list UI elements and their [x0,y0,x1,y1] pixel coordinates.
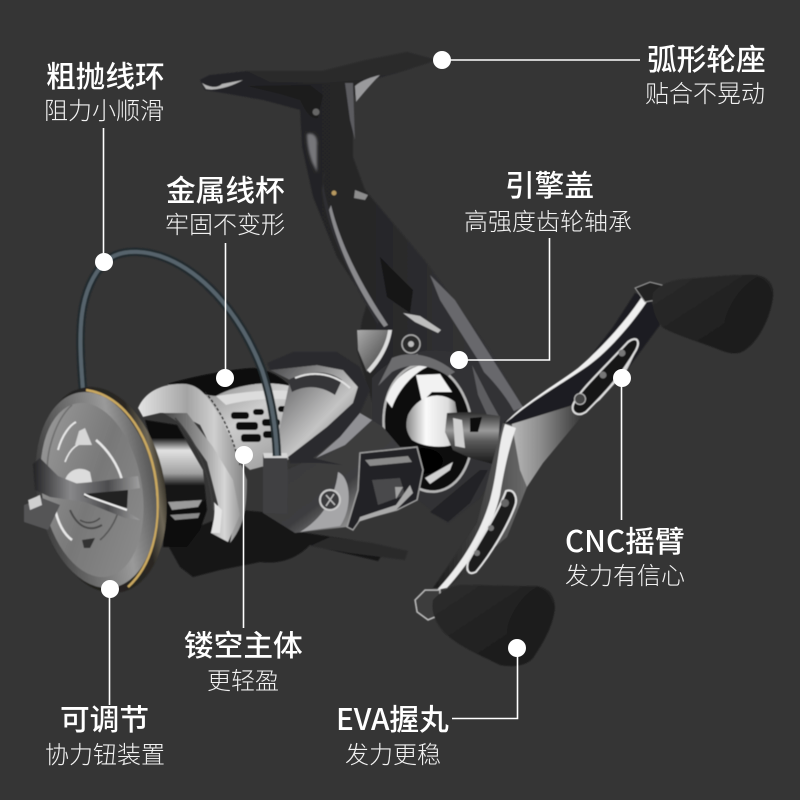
fishing reel illustration [21,52,773,666]
spool upper section with slots [167,368,317,470]
spool cylinder [145,420,207,547]
callout: 引擎盖 [450,162,632,369]
face ridges [47,405,122,540]
callout: 可调节 [45,580,165,770]
arm upper section [503,293,660,425]
bail wire [80,252,277,456]
gear housing [372,335,518,524]
lower black skirt [165,510,408,577]
rotor arc [267,352,370,465]
arm upper slot [573,339,638,414]
callout: 弧形轮座: 弧形轮座 [647,36,766,79]
callout: 金属线杯: 牢固不变形 [165,205,285,240]
callout: 镂空主体 [184,446,303,696]
callout: 引擎盖: 引擎盖 [505,162,594,205]
callout: 镂空主体: 更轻盈 [207,661,279,696]
reel stem and foot [200,52,523,470]
callout: 弧形轮座: 贴合不晃动 [645,74,765,109]
callout: CNC摇臂: 发力有信心 [565,556,685,591]
callout: 引擎盖: 高强度齿轮轴承 [464,202,632,237]
handle arm [433,293,660,590]
spool ring band [163,413,240,542]
callout: CNC摇臂: CNC摇臂 [565,518,685,561]
arm lower section [433,423,527,588]
spool rear skirt [138,384,247,543]
rotor arc inner [270,365,358,457]
callout: EVA握丸 [336,639,526,770]
spool front face [21,377,182,603]
callout: 镂空主体: 镂空主体 [184,622,303,665]
bail arm base [263,352,423,533]
callout: 粗抛线环 [44,53,165,271]
ventilation slots [231,406,299,442]
gold trim [86,390,158,587]
housing bolt [402,335,420,360]
logo knob [300,472,349,532]
callout: EVA握丸: EVA握丸 [336,696,449,739]
chrome dome [406,396,462,447]
drag knob [24,458,140,530]
lower handle knob [415,585,555,666]
callout: 可调节: 可调节 [60,696,149,739]
callout: 粗抛线环: 粗抛线环 [46,53,165,96]
callout: 弧形轮座 [433,36,766,109]
line roller block [263,453,288,514]
side frame [347,447,423,530]
callout: EVA握丸: 发力更稳 [345,735,441,770]
arm centre plate [497,405,587,510]
upper handle knob [635,275,773,353]
callout: 可调节: 协力钮装置 [45,735,165,770]
arm lower slot [467,490,516,573]
chrome ring [376,358,480,498]
callout: 金属线杯: 金属线杯 [166,167,285,210]
callout: CNC摇臂 [565,369,685,591]
callout: 粗抛线环: 阻力小顺滑 [44,91,164,126]
callout: 金属线杯 [165,167,285,387]
main shaft [445,412,500,465]
